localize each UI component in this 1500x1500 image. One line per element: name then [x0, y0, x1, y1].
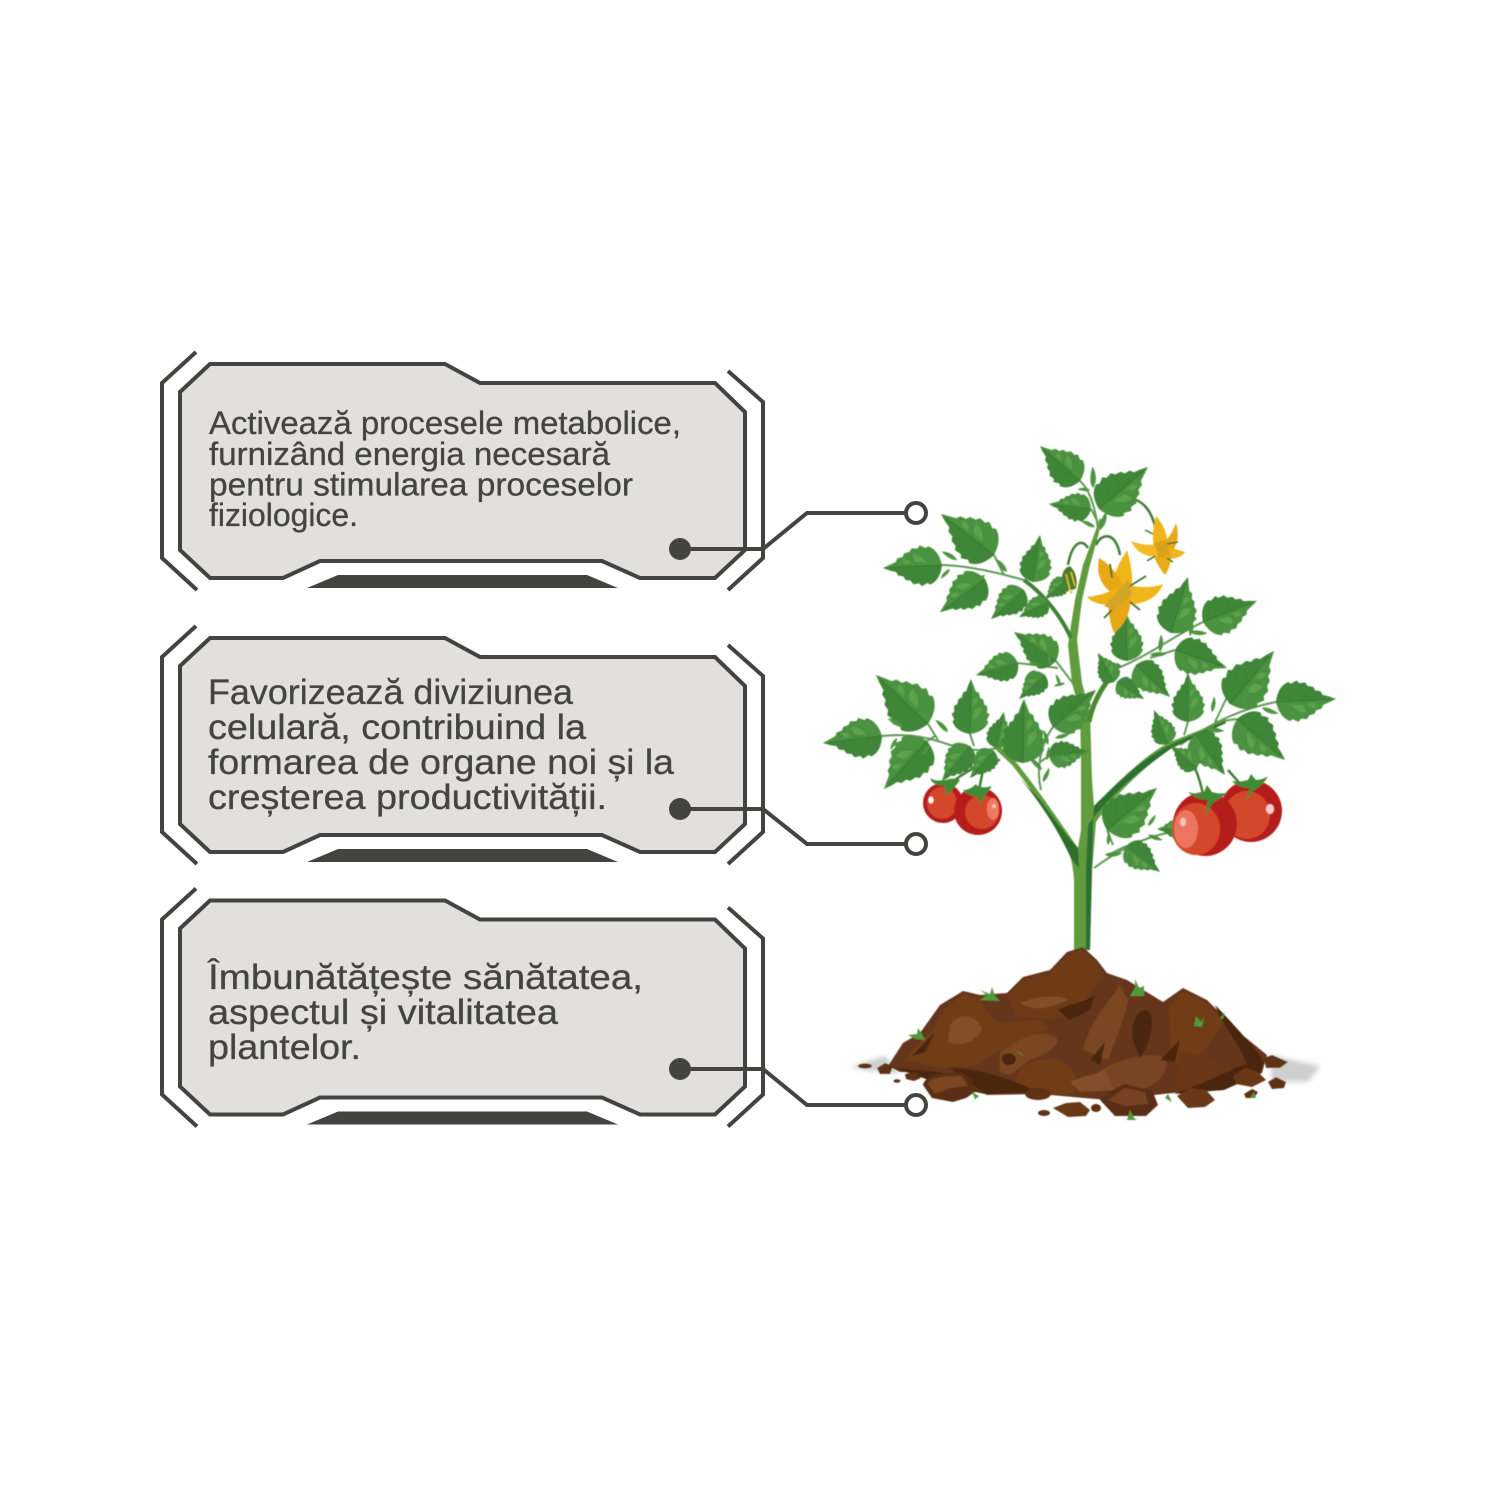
text: metabolic processes: Activează procesele metabolice, [209, 405, 681, 441]
panel: metabolic processes [162, 352, 763, 590]
connector: panel 2 to plant [669, 798, 926, 854]
text: metabolic processes: furnizând energia necesară [209, 436, 610, 472]
text: cell division: creșterea productivității. [208, 778, 607, 817]
soil shadow [850, 1055, 1320, 1082]
leaves [821, 432, 1337, 884]
flower stems [945, 499, 1250, 810]
grass tufts [908, 979, 1256, 1120]
text: plant health: aspectul și vitalitatea [208, 993, 559, 1032]
panel: cell division [162, 626, 763, 864]
flower: large yellow [1087, 550, 1163, 633]
flower: small yellow [1131, 516, 1185, 575]
text: metabolic processes: pentru stimularea proceselor [209, 466, 633, 502]
panel: plant health [162, 888, 763, 1126]
text: plant health: Îmbunătățește sănătatea, [207, 958, 643, 997]
text: plant health [207, 958, 643, 1067]
tomatoes: left pair [923, 778, 1002, 835]
soil clods [858, 1055, 1288, 1117]
text: metabolic processes: fiziologice. [209, 497, 358, 533]
text: metabolic processes [209, 405, 681, 533]
text: cell division [208, 673, 675, 817]
text: cell division: celulară, contribuind la [208, 708, 587, 747]
small leaflets [887, 467, 1279, 858]
illustration: tomato plant [821, 432, 1337, 1120]
soil mound [888, 947, 1267, 1100]
text: cell division: Favorizează diviziunea [208, 673, 574, 712]
main stem and branches [994, 518, 1226, 950]
connector: panel 1 to plant [669, 503, 926, 560]
connector: panel 3 to plant [669, 1058, 926, 1115]
tomatoes: right pair [1172, 774, 1282, 856]
text: plant health: plantelor. [208, 1028, 361, 1067]
thin leaf stems [882, 481, 1276, 868]
flower bud [1062, 567, 1077, 594]
text: cell division: formarea de organe noi și la [208, 743, 675, 782]
